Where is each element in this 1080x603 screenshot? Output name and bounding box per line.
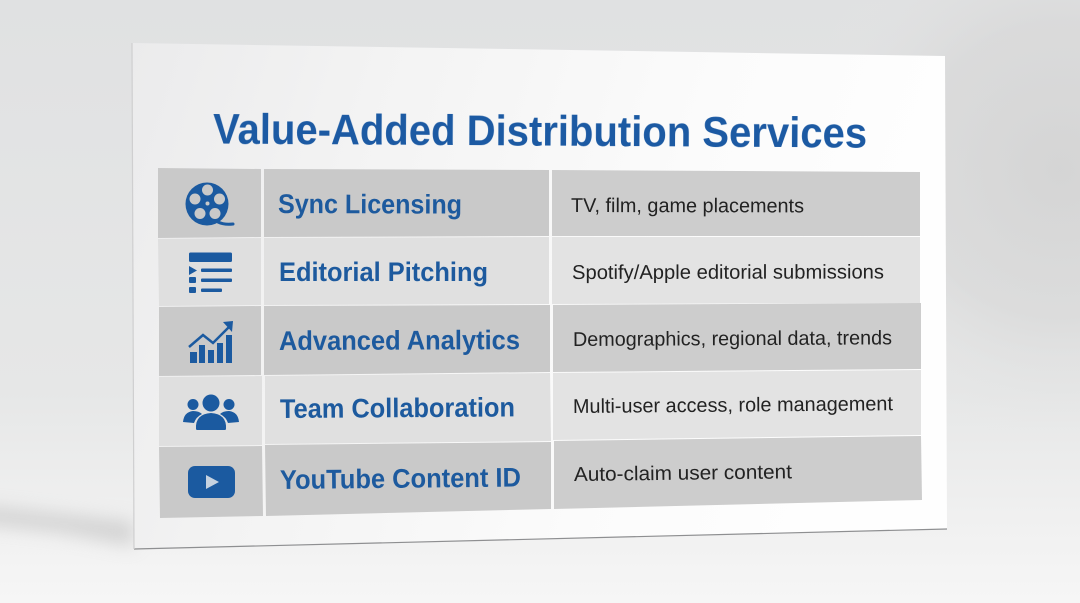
icon: team bbox=[183, 394, 239, 430]
description: Auto-claim user content bbox=[574, 461, 792, 486]
label: Team Collaboration bbox=[280, 392, 515, 424]
label: Editorial Pitching bbox=[279, 257, 488, 287]
description: TV, film, game placements bbox=[571, 195, 804, 217]
label: YouTube Content ID bbox=[280, 462, 521, 495]
row 5: YouTube Content ID bbox=[159, 436, 922, 518]
table bbox=[158, 168, 922, 518]
label: Advanced Analytics bbox=[279, 325, 520, 356]
row 1: Sync Licensing bbox=[158, 168, 920, 238]
board bbox=[132, 43, 947, 549]
icon: film reel bbox=[186, 182, 233, 226]
title: Value-Added Distribution Services bbox=[213, 106, 867, 157]
row 3: Advanced Analytics bbox=[159, 303, 921, 376]
icon: growth chart bbox=[189, 321, 233, 363]
icon: video play button bbox=[188, 466, 235, 498]
description: Multi-user access, role management bbox=[573, 393, 893, 418]
row 4: Team Collaboration bbox=[159, 370, 921, 446]
icon: list bbox=[189, 252, 232, 293]
row 2: Editorial Pitching bbox=[158, 237, 920, 306]
description: Demographics, regional data, trends bbox=[573, 327, 892, 351]
label: Sync Licensing bbox=[278, 189, 462, 220]
description: Spotify/Apple editorial submissions bbox=[572, 261, 884, 284]
